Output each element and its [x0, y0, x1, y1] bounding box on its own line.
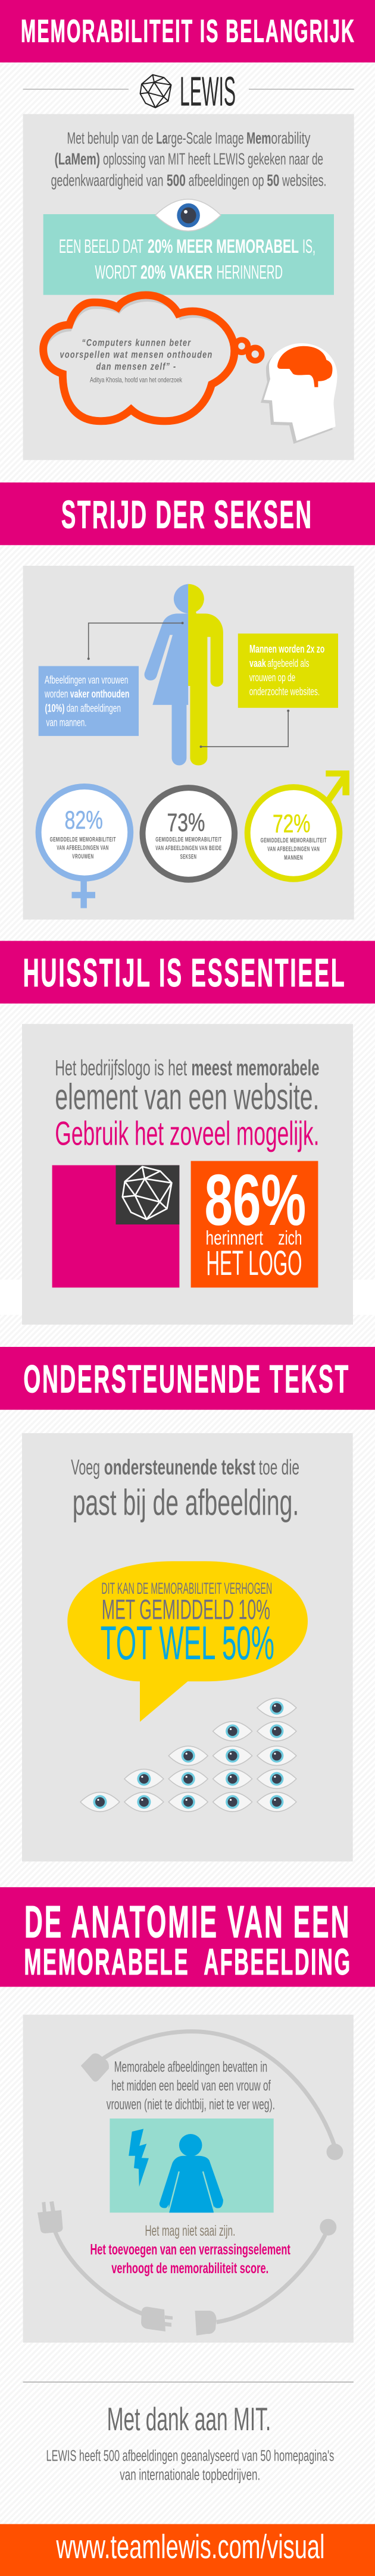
- intro text: (LaMem): [55, 150, 100, 168]
- intro text: rge-Scale Image: [168, 129, 244, 148]
- thought cloud with quote: “Computers kunnen beter: [82, 337, 191, 349]
- thought cloud with quote: Aditya Khosla, hoofd van het onderzoek: [90, 375, 183, 384]
- stat circle: both 73%: 73%: [167, 808, 205, 837]
- callout: men: [238, 634, 338, 708]
- teal callout: WORDT: [95, 261, 137, 283]
- power cord: lower: [38, 2201, 336, 2336]
- stat circle: both 73%: SEKSEN: [180, 853, 196, 860]
- logo text: Het bedrijfslogo is het: [55, 1056, 188, 1080]
- panel: anatomy: [23, 2014, 354, 2343]
- LEWIS logo: [23, 68, 354, 115]
- teal callout: HERINNERD: [217, 261, 283, 283]
- section: memorabiliteit is belangrijk: [0, 0, 375, 460]
- callout: men: afgebeeld als: [267, 657, 310, 669]
- stat: 86%: [191, 1159, 318, 1287]
- callout: men: Mannen worden 2x zo: [249, 643, 324, 655]
- panel: gender: [23, 566, 354, 920]
- intro text: 50: [267, 171, 279, 190]
- icon: eye: [155, 199, 221, 231]
- heading banner: [0, 1347, 375, 1410]
- supporting text: Voeg: [71, 1455, 100, 1479]
- anatomy text: bottom: Het mag niet saai zijn.: [145, 2223, 235, 2239]
- section: ondersteunende tekst: [0, 1347, 375, 1862]
- stat circle: women 82%: [39, 786, 130, 908]
- stat circle: women 82%: GEMIDDELDE MEMORABILITEIT: [50, 836, 116, 843]
- credits: [23, 2381, 354, 2483]
- section: huisstijl is essentieel: [0, 941, 375, 1325]
- intro text: Mem: [246, 129, 271, 148]
- stat circle: men 72%: MANNEN: [284, 854, 303, 861]
- intro text: La: [156, 129, 168, 148]
- heading banner: [0, 482, 375, 545]
- callout: women: van mannen.: [46, 716, 87, 728]
- callout: women: (10%): [45, 703, 65, 714]
- credits: Met dank aan MIT.: [107, 2400, 271, 2437]
- LEWIS logo: LEWIS: [180, 68, 236, 115]
- stat circle: women 82%: VROUWEN: [72, 853, 94, 860]
- callout: men: vaak: [249, 657, 266, 669]
- section: strijd der seksen: [0, 482, 375, 920]
- anatomy text: bottom: [90, 2223, 290, 2277]
- footer banner: [0, 2524, 375, 2576]
- anatomy text: top: Memorabele afbeeldingen bevatten in: [114, 2058, 267, 2075]
- teal callout: [43, 214, 334, 295]
- logo text: [55, 1056, 319, 1153]
- heading banner: MEMORABELE: [24, 1941, 189, 1983]
- stat circle: both 73%: VAN AFBEELDINGEN VAN BEIDE: [155, 845, 221, 852]
- intro text: orability: [271, 129, 311, 148]
- teal callout: EEN BEELD DAT: [59, 236, 143, 257]
- callout: women: dan afbeeldingen: [67, 703, 121, 714]
- callout: women: [39, 666, 139, 736]
- power cord: upper: [81, 2032, 343, 2160]
- panel: text: [22, 1433, 353, 1862]
- intro text: gedenkwaardigheid van: [51, 171, 163, 190]
- anatomy text: top: vrouwen (niet te dichtbij, niet te ver weg).: [107, 2096, 275, 2113]
- speech bubble: [67, 1561, 308, 1722]
- callout: women: worden: [44, 688, 68, 700]
- intro text: afbeeldingen op: [189, 171, 264, 190]
- section: anatomie: [0, 1887, 375, 2343]
- thought cloud with quote: dan mensen zelf” -: [96, 361, 176, 372]
- stat circle: both 73%: [142, 788, 235, 880]
- teal callout: IS,: [302, 236, 315, 257]
- anatomy text: bottom: verhoogt de memorabiliteit score.: [111, 2260, 268, 2277]
- connector: woman: [88, 622, 184, 660]
- anatomy text: top: [107, 2058, 275, 2113]
- supporting text: ondersteunende tekst: [104, 1455, 255, 1479]
- intro text: websites.: [282, 171, 326, 190]
- image: woman with lightning: [110, 2119, 274, 2213]
- stat circle: women 82%: 82%: [64, 806, 103, 835]
- callout: men: vrouwen op de: [249, 672, 295, 684]
- intro text: 500: [167, 171, 186, 190]
- thought cloud with quote: voorspellen wat mensen onthouden: [60, 349, 213, 361]
- callout: women: Afbeeldingen van vrouwen: [45, 674, 128, 686]
- stat: 86%: herinnert: [206, 1227, 263, 1249]
- figure: half woman, half man: [145, 584, 223, 765]
- panel: logo: [22, 1024, 353, 1325]
- stat circle: men 72%: 72%: [273, 810, 311, 838]
- heading banner: [0, 0, 375, 62]
- callout: men: onderzochte websites.: [249, 686, 320, 698]
- stat circle: men 72%: [248, 770, 349, 879]
- intro text: Met behulp van de: [67, 129, 154, 148]
- panel: intro: [23, 114, 354, 460]
- stat: 86%: zich: [278, 1227, 302, 1249]
- connector: man: [200, 710, 289, 748]
- supporting text: [71, 1455, 299, 1523]
- stat circle: men 72%: GEMIDDELDE MEMORABILITEIT: [261, 837, 327, 844]
- supporting text: toe die: [259, 1455, 299, 1479]
- teal callout: 20% MEER MEMORABEL: [148, 236, 299, 257]
- icon: head with brain: [261, 343, 338, 444]
- stat circle: both 73%: GEMIDDELDE MEMORABILITEIT: [155, 836, 221, 843]
- stat: 86%: 86%: [205, 1159, 306, 1240]
- heading banner: [0, 1887, 375, 1987]
- stat circle: women 82%: VAN AFBEELDINGEN VAN: [57, 845, 109, 852]
- credits: van internationale topbedrijven.: [120, 2467, 260, 2483]
- webpage with logo tile: [52, 1165, 179, 1287]
- anatomy text: top: het midden een beeld van een vrouw of: [111, 2077, 271, 2094]
- eyes pictogram: [80, 1698, 296, 1812]
- teal callout: 20% VAKER: [140, 261, 212, 283]
- callout: women: vaker onthouden: [70, 688, 129, 700]
- heading banner: [0, 941, 375, 1004]
- thought cloud with quote: [43, 295, 262, 428]
- intro text: [51, 129, 326, 190]
- stat circle: men 72%: VAN AFBEELDINGEN VAN: [267, 846, 320, 853]
